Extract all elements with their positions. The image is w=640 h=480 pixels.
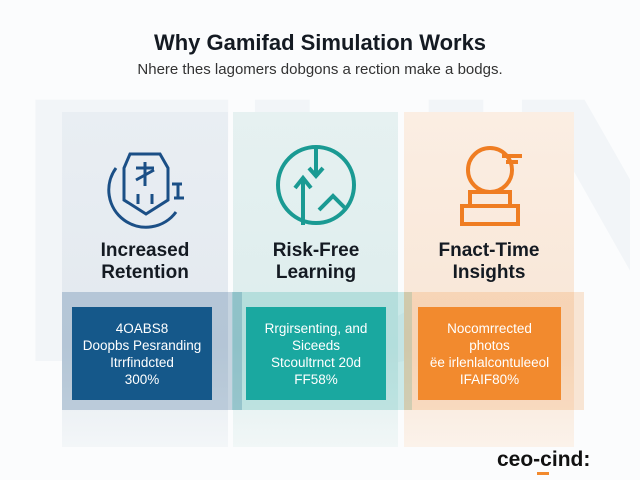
- box: insights stats: IFAIF80%: [460, 372, 519, 386]
- shade behind boxes: [62, 292, 242, 410]
- box: risk-free stats: [246, 307, 386, 400]
- icon: risk-free: [276, 145, 356, 225]
- heading: risk-free: [273, 240, 359, 283]
- subtitle: Nhere thes lagomers dobgons a rection make a bodgs.: [137, 61, 503, 78]
- panel: insights: [404, 112, 574, 447]
- title: Why Gamifad Simulation Works: [154, 30, 486, 55]
- box: risk-free stats: Stcoultrnct 20d: [271, 354, 361, 370]
- panel: risk-free: [233, 112, 398, 447]
- box: insights stats: ëe irlenlalcontuleeol: [430, 354, 549, 370]
- box: insights stats: [418, 307, 561, 400]
- box: retention stats: Doopbs Pesranding: [83, 338, 201, 352]
- box: risk-free stats: Siceeds: [292, 338, 340, 352]
- icon: insights: [460, 146, 522, 226]
- box: retention stats: Itrrfindcted: [110, 354, 174, 370]
- panel: retention: [62, 112, 228, 447]
- heading: risk-free: Learning: [276, 262, 356, 283]
- logo: ceo-cind:: [497, 448, 590, 471]
- box: insights stats: Nocomrrected: [447, 320, 532, 336]
- heading: retention: [101, 240, 189, 283]
- box: retention stats: 4OABS8: [116, 320, 168, 336]
- box: retention stats: [72, 307, 212, 400]
- heading: insights: Fnact-Time: [438, 240, 540, 261]
- heading: insights: [438, 240, 540, 283]
- box: insights stats: photos: [469, 338, 510, 352]
- icon: retention: [107, 152, 184, 229]
- box: retention stats: 300%: [125, 372, 159, 386]
- box: risk-free stats: FF58%: [294, 372, 338, 386]
- heading: retention: Increased: [101, 240, 189, 261]
- heading: retention: Retention: [101, 262, 189, 283]
- heading: insights: Insights: [453, 262, 525, 283]
- heading: risk-free: Risk-Free: [273, 240, 359, 261]
- box: risk-free stats: Rrgirsenting, and: [265, 320, 367, 336]
